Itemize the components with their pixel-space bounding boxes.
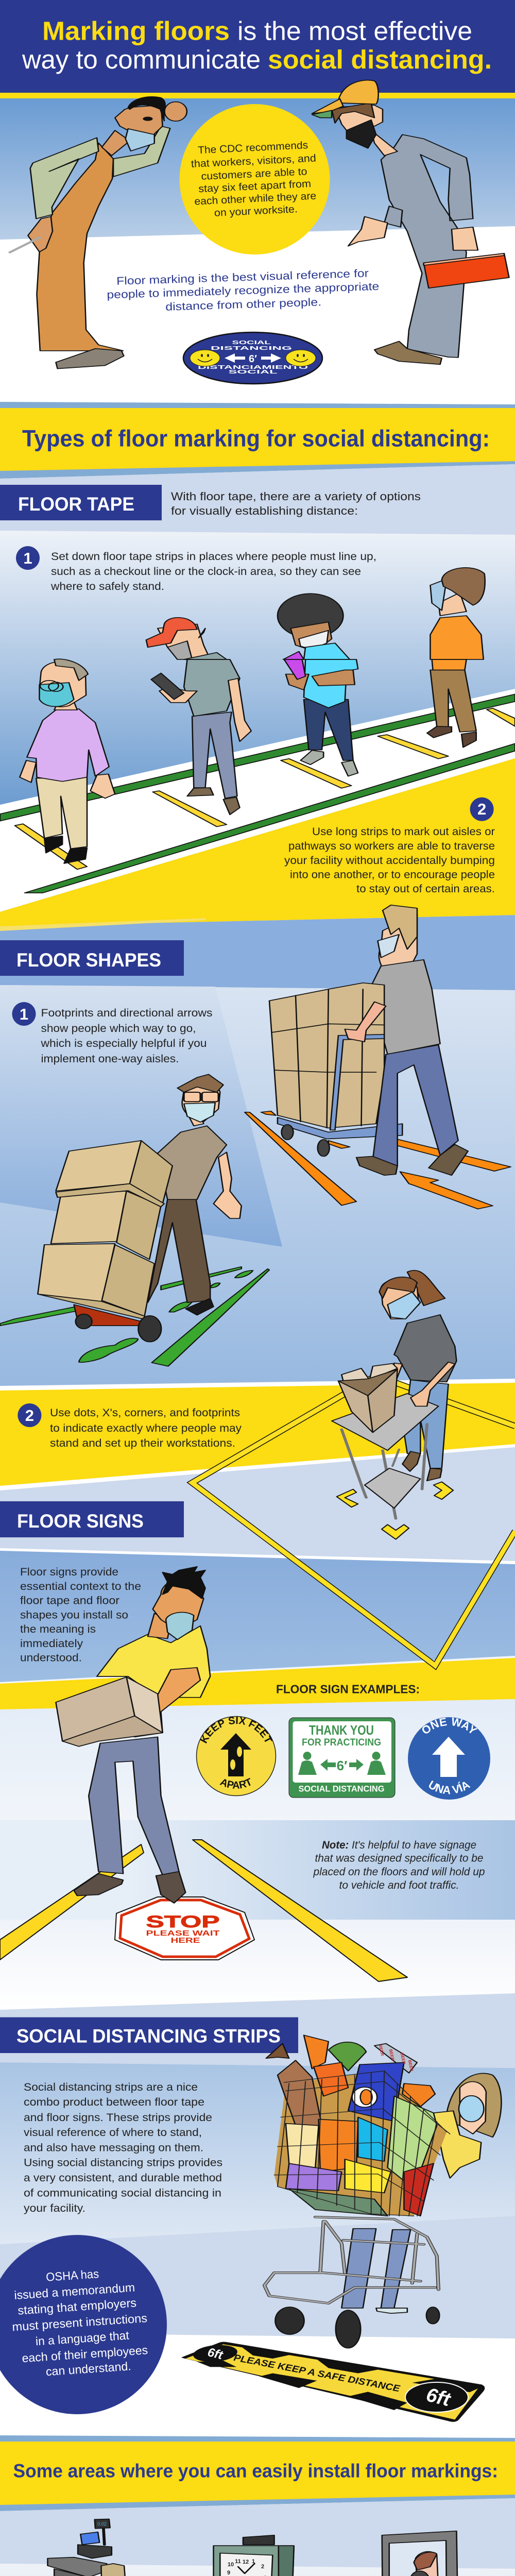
step 2: floor tape: Use long strips to mark out aisles or [312,825,495,838]
icon: waiting area window [367,2531,458,2576]
text block: floor marking reference: people to immediately recognize the appropriate [107,280,380,301]
text block: footprints step 1: Footprints and directional arrows [41,1007,212,1019]
callout: OSHA memorandum: issued a memorandum [14,2280,135,2302]
callout: OSHA memorandum: in a language that [35,2328,130,2348]
icon: checkout register [47,2519,131,2576]
illustration: man in yellow shirt carrying box [97,1567,210,1698]
step 2: floor tape: to stay out of certain areas. [356,883,495,895]
text block: floor marking reference [106,267,380,315]
step 2: floor tape: into one another, or to encourage people [290,869,495,881]
illustration: person in grey shirt with phone [151,659,251,815]
illustration: worker in overalls [10,97,187,369]
text block: floor marking reference: distance from other people. [165,296,321,313]
illustration: worker pushing cart of boxes [269,905,468,1175]
text block: floor marking reference: Floor marking is the best visual reference for [116,267,369,287]
text block: floor tape intro [171,490,421,517]
text block: social distancing strips: and floor signs. These strips provide [24,2111,212,2124]
callout: CDC recommendation circle: that workers, visitors, and [191,152,316,170]
text block: dots and corners step 2: to indicate exactly where people may [50,1422,242,1434]
icon: stop floor sign: STOP [146,1912,219,1931]
floor tape lines by stop sign [0,1840,407,1981]
step 1: floor tape: such as a checkout line or the clock-in area, so they can see [51,565,361,578]
step 1: floor tape: where to safely stand. [50,580,164,592]
icon: keep six feet apart sign [196,1716,276,1796]
text on beer cans: BEER [388,2049,395,2061]
note text: Note: It's helpful to have signage [322,1839,476,1851]
icon: time clock: 10 [228,2562,234,2568]
title: social distancing. [268,45,492,74]
illustration: person in cyan shirt [284,659,358,776]
icon: time clock: 9 [227,2570,230,2576]
heading: floor sign examples: FLOOR SIGN EXAMPLES: [276,1683,420,1696]
text block: floor tape intro: With floor tape, there are a variety of options [171,490,421,503]
icon: stop floor sign [115,1897,254,1960]
text on beer cans: BEER [407,2060,414,2072]
callout: CDC recommendation circle [179,104,330,255]
icon: time clock: 11 [235,2558,241,2565]
callout: OSHA memorandum [0,2235,167,2414]
illustration: worker with toolbox [312,80,509,364]
callout: OSHA memorandum: OSHA has [45,2267,99,2284]
icon: stop floor sign: HERE [171,1936,200,1945]
text block: social distancing strips: and also have messaging on them. [24,2141,203,2154]
illustration: worker with hand truck of boxes [38,1074,242,1342]
icon: cart wheels [275,2307,439,2348]
text block: social distancing strips: a very consistent, and durable method [24,2172,222,2184]
icon: thank you for practicing sign: THANK YOU [309,1722,374,1738]
heading: areas to install: Some areas where you can easily install floor markings: [13,2461,498,2482]
illustration: man's box and legs [56,1668,200,1903]
title: is the most effective [237,16,472,45]
icon: one way sign: ONE WAY [422,1718,478,1734]
callout: OSHA memorandum: must present instructions [12,2311,148,2333]
icon: social distancing floor decal: DISTANCIAMIENTO [198,364,308,370]
text on beer cans: BEER [400,2053,406,2065]
illustration: person with afro and phone [278,594,350,659]
text block: floor signs: immediately [20,1637,83,1650]
icon: time clock: 12 [243,2559,249,2565]
heading: types of floor marking: Types of floor marking for social distancing: [22,426,490,451]
icon: thank you for practicing sign: FOR PRACTICING [302,1737,381,1748]
icon: social distancing strip: 6ft [206,2345,225,2363]
illustration: person in orange shirt [430,568,485,659]
callout: CDC recommendation circle: The CDC recommends [198,140,308,156]
panel label: social distancing strips: SOCIAL DISTANCING STRIPS [16,2026,281,2046]
illustration: head of worker at table [380,1270,445,1319]
step 2: floor tape: your facility without accidentally bumping [284,854,495,867]
step 2: floor tape: pathways so workers are able to traverse [288,840,495,852]
floor tape lines [0,694,515,893]
text block: floor signs: the meaning is [20,1623,96,1635]
text block: social distancing strips: Social distancing strips are a nice [24,2081,198,2093]
text block: social distancing strips: visual reference of where to stand, [24,2126,202,2139]
callout: CDC recommendation circle: on your worksite. [214,204,298,219]
panel label: floor tape [0,485,162,520]
icon: social distancing strip: PLEASE KEEP A SAFE DISTANCE [233,2352,401,2394]
text block: dots and corners step 2: Use dots, X's, corners, and footprints [50,1406,240,1419]
text block: social distancing strips: Using social distancing strips provides [24,2157,222,2169]
title [22,16,492,74]
text block: floor signs: shapes you install so [20,1608,128,1621]
illustration: person in red cap [146,618,227,659]
icon: stop floor sign: PLEASE WAIT [146,1929,219,1938]
callout: OSHA memorandum: can understand. [45,2359,131,2378]
step 2: floor tape [284,798,495,895]
text block: dots and corners step 2: stand and set up their workstations. [50,1437,235,1449]
illustration: person in purple shirt [20,659,115,863]
illustration: legs of person in orange shirt [427,659,476,748]
icon: keep six feet apart sign: KEEP SIX FEET [200,1717,272,1743]
illustration: woman with shopping cart [264,2035,501,2308]
text block: floor signs: essential context to the [20,1580,141,1592]
text block: social distancing strips: your facility. [24,2202,85,2214]
note text: placed on the floors and will hold up [313,1866,485,1878]
note text [313,1839,485,1891]
orange floor arrows [245,1111,511,1209]
text block: floor signs: floor tape and floor [20,1594,119,1606]
panel label: floor shapes: FLOOR SHAPES [16,950,161,971]
text block: floor signs [20,1566,141,1664]
icon: social distancing floor decal: DISTANCING [211,345,292,351]
text block: footprints step 1 [12,1002,212,1065]
text block: footprints step 1: show people which way to go, [41,1022,196,1035]
icon: social distancing floor decal: 6′ [249,353,257,365]
text block: floor signs: Floor signs provide [20,1566,118,1578]
panel label: floor tape: FLOOR TAPE [18,494,134,515]
illustration: worker at table with box [332,1315,456,1539]
floor marking square outline [192,1376,515,1666]
text block: footprints step 1: implement one-way aisles. [41,1053,179,1065]
text on beer cans: BEER [378,2044,385,2057]
icon: time clock [214,2535,294,2576]
icon: keep six feet apart sign: APART [219,1777,251,1789]
callout: CDC recommendation circle: each other while they are [194,190,317,208]
icon: one way sign: UNA VÍA [429,1781,471,1794]
icon: time clock: 2 [261,2564,264,2570]
icon: social distancing floor decal: SOCIAL [229,369,278,375]
panel label: floor shapes [0,940,184,976]
icon: social distancing floor decal: SOCIAL [232,340,271,346]
icon: social distancing floor decal [183,332,322,384]
text block: dots and corners step 2: 2 [25,1406,34,1425]
text block: social distancing strips [24,2081,222,2214]
icon: checkout register: 0.02 [97,2521,107,2527]
callout: CDC recommendation circle: customers are able to [201,166,307,182]
text block: social distancing strips: of communicating social distancing in [24,2187,221,2199]
step 2: floor tape: 2 [477,800,486,818]
icon: social distancing strip: 6ft [424,2384,453,2411]
text on beer cans [378,2044,414,2072]
note text: to vehicle and foot traffic. [339,1879,459,1891]
icon: thank you for practicing sign [289,1718,395,1798]
text block: dots and corners step 2 [18,1403,242,1449]
callout: OSHA memorandum: each of their employees [22,2343,148,2365]
icon: time clock: 1 [252,2558,255,2565]
green floor tape and footprints [0,1267,269,1366]
title: way to communicate [22,45,261,74]
text block: floor signs: understood. [20,1652,82,1664]
note text: that was designed specifically to be [315,1853,483,1864]
text block: floor tape intro: for visually establishing distance: [171,504,358,517]
step 1: floor tape [16,546,376,592]
panel label: floor signs: FLOOR SIGNS [17,1511,144,1532]
title: Marking floors [42,16,230,45]
panel label: floor signs [0,1501,184,1537]
icon: social distancing strip [182,2342,484,2421]
icon: one way sign [408,1717,490,1800]
text block: footprints step 1: 1 [20,1005,28,1023]
text block: footprints step 1: which is especially helpful if you [40,1037,207,1049]
icon: thank you for practicing sign: SOCIAL DISTANCING [299,1784,384,1794]
callout: OSHA memorandum: stating that employers [18,2296,137,2317]
step 1: floor tape: 1 [23,549,32,567]
callout: CDC recommendation circle: stay six feet apart from [198,178,312,195]
step 1: floor tape: Set down floor tape strips in places where people must line up, [51,550,376,563]
icon: thank you for practicing sign: 6′ [337,1758,347,1773]
panel label: social distancing strips [0,2018,298,2053]
text block: social distancing strips: combo product between floor tape [24,2096,204,2108]
